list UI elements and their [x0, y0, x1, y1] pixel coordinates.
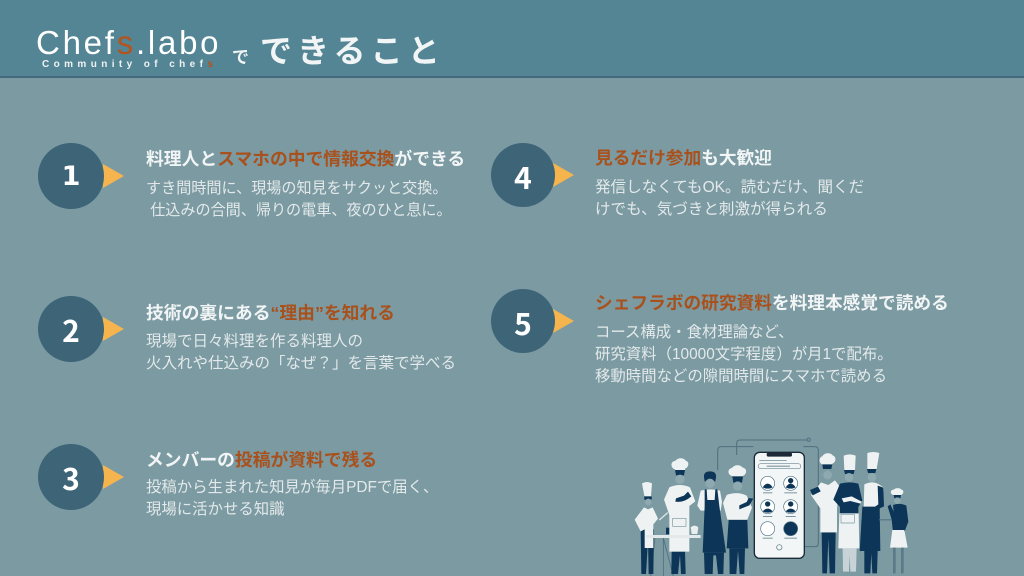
- number 4: [491, 143, 555, 207]
- title particle: で: [232, 48, 249, 67]
- chef: white vest dark apron: [860, 452, 884, 573]
- item 1: [38, 143, 465, 219]
- number 1: [38, 143, 104, 209]
- left chefs group: [635, 458, 753, 576]
- chef: dark jacket white apron: [833, 454, 862, 572]
- table: [651, 526, 698, 576]
- chef: dark apron: [697, 471, 726, 574]
- illustration: chefs with smartphone: [634, 438, 908, 576]
- logo wordmark: Chefs.labo: [36, 24, 221, 61]
- logo tagline: Community of chefs: [42, 59, 217, 70]
- number 3: 3: [62, 455, 80, 499]
- number 2: [38, 296, 104, 362]
- connector lines: [718, 438, 818, 547]
- number 3: [38, 444, 104, 510]
- item 3: [38, 444, 438, 518]
- arrow 2: [103, 317, 124, 341]
- item 5: [491, 289, 949, 385]
- text 4: 発信しなくてもOK。読むだけ、聞くだ けでも、気づきと刺激が得られる: [595, 179, 864, 218]
- text 3: 投稿から生まれた知見が毎月PDFで届く、 現場に活かせる知識: [146, 479, 438, 518]
- heading 4: 見るだけ参加も大歓迎: [595, 148, 772, 168]
- heading 2: 技術の裏にある“理由”を知れる: [146, 303, 395, 323]
- header band: [0, 0, 1024, 78]
- item 2: [38, 296, 456, 372]
- right chefs group: [810, 452, 908, 573]
- arrow 5: [553, 309, 574, 333]
- number 4: 4: [514, 154, 532, 198]
- smartphone: [754, 452, 804, 558]
- chef: tablet: [810, 453, 839, 573]
- chef: small with apron: [635, 482, 668, 574]
- logo: [36, 24, 221, 70]
- number 2: 2: [62, 307, 80, 351]
- chef: short, dark jacket: [879, 488, 908, 573]
- number 5: 5: [514, 300, 532, 344]
- number 1: 1: [62, 161, 80, 192]
- arrow 1: [103, 164, 124, 188]
- text 5: コース構成・食材理論など、 研究資料（10000文字程度）が月1で配布。 移動時間などの隙間時間にスマホで読める: [595, 324, 893, 385]
- chef: white jacket dark apron: [723, 465, 753, 574]
- chef: tall with tablet: [646, 458, 701, 574]
- title: できること: [260, 33, 445, 69]
- arrow 4: [553, 163, 574, 187]
- item 4: [491, 143, 864, 218]
- number 5: [491, 289, 555, 353]
- heading 5: シェフラボの研究資料を料理本感覚で読める: [595, 293, 949, 313]
- text 1: すき間時間に、現場の知見をサクッと交換。 仕込みの合間、帰りの電車、夜のひと息に。: [146, 180, 452, 219]
- arrow 3: [103, 465, 124, 489]
- text 2: 現場で日々料理を作る料理人の 火入れや仕込みの「なぜ？」を言葉で学べる: [146, 333, 456, 372]
- heading 3: メンバーの投稿が資料で残る: [146, 450, 377, 470]
- heading 1: 料理人とスマホの中で情報交換ができる: [146, 149, 465, 169]
